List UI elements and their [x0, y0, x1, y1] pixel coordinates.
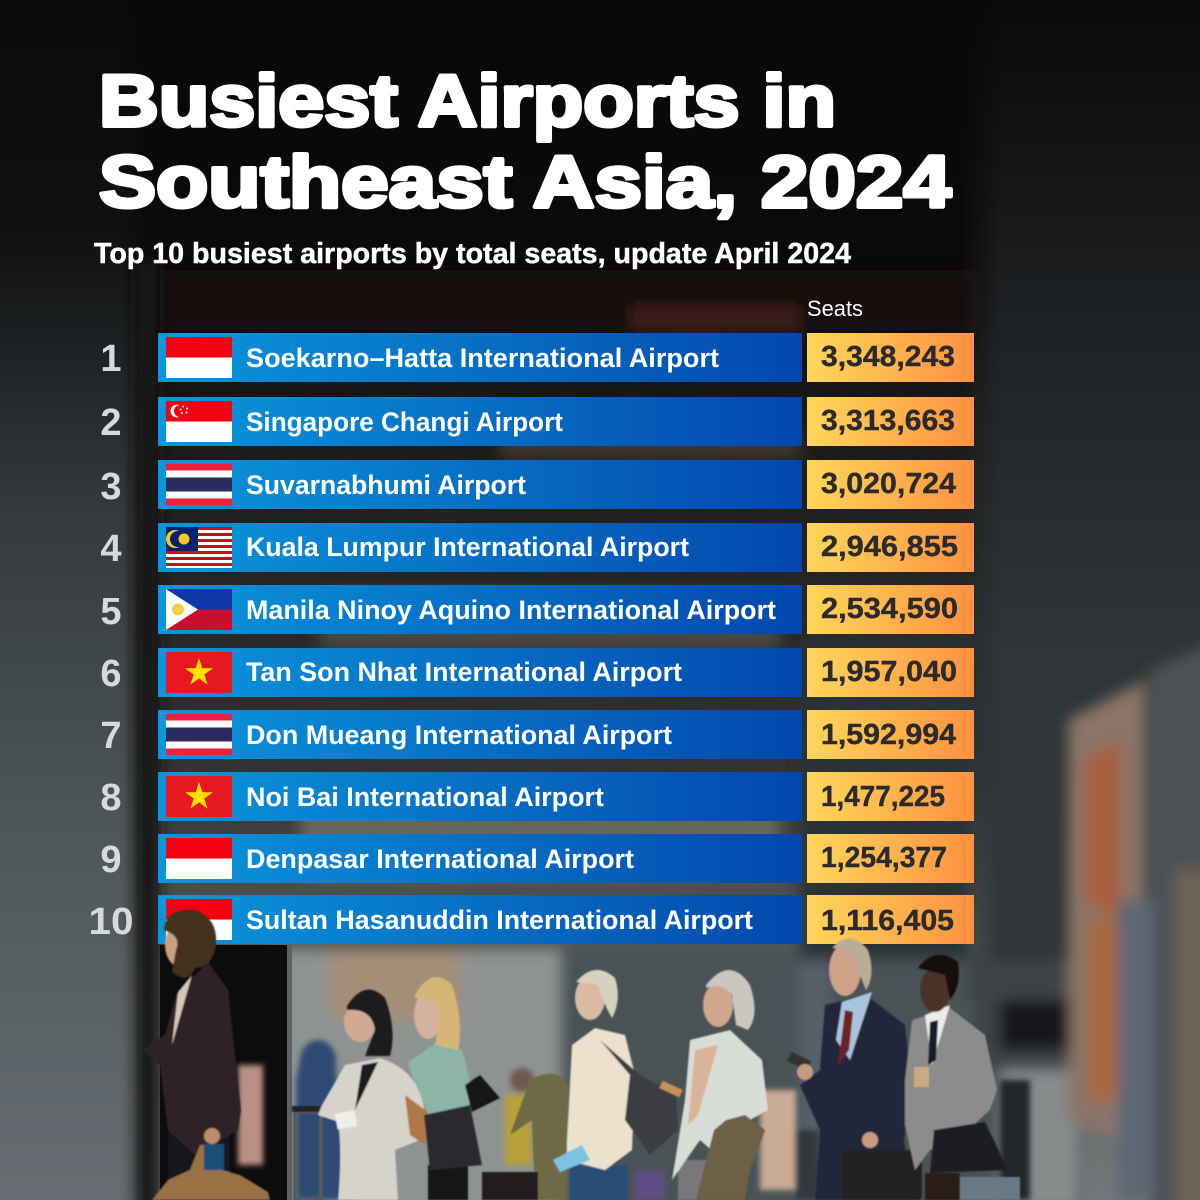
rank numbers	[88, 338, 134, 943]
airport names: Sultan Hasanuddin International Airport	[246, 905, 753, 935]
airport names: Don Mueang International Airport	[246, 720, 672, 750]
airport names: Denpasar International Airport	[246, 844, 634, 874]
airport name bars	[158, 333, 802, 944]
seat values: 3,348,243	[821, 341, 955, 373]
person: man in grey suit with coffee and luggage	[905, 955, 1020, 1200]
airport names: Singapore Changi Airport	[246, 407, 563, 437]
flag: Indonesia (rank 9)	[166, 838, 232, 879]
rank numbers: 1	[100, 338, 122, 380]
airport names: Noi Bai International Airport	[246, 782, 604, 812]
rank numbers: 3	[100, 466, 122, 508]
seat values: 2,946,855	[821, 531, 958, 563]
airport names: Soekarno–Hatta International Airport	[246, 343, 719, 373]
title: Southeast Asia, 2024	[99, 142, 951, 223]
rank numbers: 10	[88, 901, 134, 943]
seat values: 1,254,377	[821, 842, 947, 874]
seat values: 2,534,590	[821, 593, 958, 625]
rank numbers: 7	[100, 715, 122, 757]
person: woman with short blonde hair, cream sweater, olive coat	[482, 970, 678, 1200]
seat values: 1,592,994	[821, 719, 956, 751]
airport names: Suvarnabhumi Airport	[246, 470, 526, 500]
seat values	[821, 341, 958, 937]
seat values: 1,957,040	[821, 656, 957, 688]
travellers in queue	[142, 910, 1020, 1200]
flag: Indonesia (rank 10)	[166, 899, 232, 940]
person: blonde woman with teal sweater	[408, 977, 500, 1200]
column heading: seats: Seats	[807, 296, 863, 321]
airport names	[246, 343, 776, 935]
rank numbers: 2	[100, 402, 122, 444]
title	[99, 61, 951, 223]
rank numbers: 6	[100, 653, 122, 695]
flag: Philippines	[166, 589, 232, 630]
rank numbers: 8	[100, 777, 122, 819]
subtitle: Top 10 busiest airports by total seats, update April 2024	[94, 238, 851, 270]
flag: Vietnam (rank 8)	[166, 776, 232, 817]
flag: Thailand (rank 7)	[166, 714, 232, 755]
airport names: Manila Ninoy Aquino International Airport	[246, 595, 776, 625]
flag: Malaysia	[166, 527, 232, 568]
person: woman with grey hair, pale cardigan and trench coat	[659, 970, 768, 1200]
flag: Indonesia (rank 1)	[166, 337, 232, 378]
airport names: Kuala Lumpur International Airport	[246, 532, 689, 562]
flag: Singapore	[166, 401, 232, 442]
seat value boxes	[807, 333, 974, 944]
seat values: 3,020,724	[821, 468, 956, 500]
seat values: 1,477,225	[821, 781, 945, 813]
flag: Thailand (rank 3)	[166, 464, 232, 505]
person: woman in pale cardigan with suitcase	[292, 990, 432, 1200]
airport names: Tan Son Nhat International Airport	[246, 657, 682, 687]
rank numbers: 9	[100, 839, 122, 881]
seat values: 3,313,663	[821, 405, 955, 437]
person: man in dark jacket with duffel bag	[142, 910, 270, 1200]
rank numbers: 5	[100, 591, 122, 633]
rank numbers: 4	[100, 528, 122, 570]
flag: Vietnam (rank 6)	[166, 652, 232, 693]
person: man in dark suit with briefcase	[787, 938, 922, 1200]
title: Busiest Airports in	[99, 61, 836, 142]
seat values: 1,116,405	[821, 905, 954, 937]
